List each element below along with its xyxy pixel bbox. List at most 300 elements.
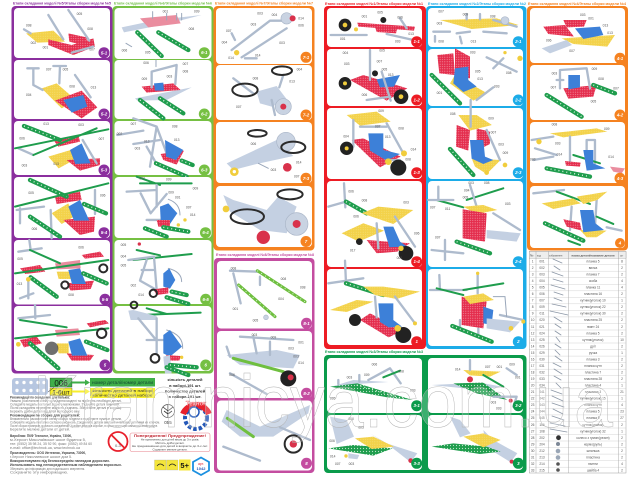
- panel: step 6-4: 009: [166, 178, 172, 182]
- table rows: 4: [621, 403, 623, 407]
- panel: step 2-4: 004: [464, 188, 470, 192]
- table rows: дріт: [590, 344, 596, 348]
- table rows: 009: [539, 305, 545, 309]
- panel: step 6-2: 007: [183, 62, 188, 66]
- panel: step 8-2: 003: [293, 354, 299, 358]
- table rows: 2: [621, 331, 623, 335]
- panel: step 4-3: 008: [552, 122, 557, 126]
- table rows: 25: [531, 416, 535, 420]
- table rows: 215: [539, 468, 545, 472]
- panel: step 1-2: 007: [377, 60, 382, 64]
- table rows: кутник(уголок) 30: [580, 312, 606, 316]
- panel: step 7-3: 006: [251, 142, 256, 146]
- panel: step 7-1: 007: [226, 29, 232, 33]
- panel: step 3-3: 003: [349, 462, 354, 466]
- table rows: 029: [539, 351, 545, 355]
- heading: stage 7: Етапи складання моделі №7/Этапы сборки модели №7: [215, 2, 313, 6]
- table rows: 2: [621, 325, 623, 329]
- panel: step 7-2: 013: [289, 80, 295, 84]
- panel: step 8-1: 005: [253, 318, 258, 322]
- table rows: 23: [620, 410, 624, 414]
- table rows: 2: [621, 436, 623, 440]
- text: instructions and manufacturer details: Берегите мелкие детали от детей.: [10, 428, 70, 432]
- badge 7: 7: [305, 239, 308, 244]
- badge 2-2: 2-2: [514, 98, 522, 102]
- text: instructions and manufacturer details: тел: (0552) 35 98 24, 35 92 90, факс: (0552) 49 84 60: [10, 442, 92, 446]
- table rows: 1: [621, 351, 623, 355]
- panel: step 3-3: 008: [348, 417, 354, 421]
- panel: step 1-2: 005: [379, 49, 385, 53]
- table rows: 2: [621, 266, 623, 270]
- panel: step 3-1: 003: [410, 389, 416, 393]
- panel: step 6-4: 009: [193, 186, 198, 190]
- table rows: 021: [539, 325, 545, 329]
- table rows: планка 5: [586, 331, 600, 335]
- panel: step 5-5: 005: [17, 257, 23, 261]
- panel: step 2-1: 007: [438, 9, 444, 13]
- table rows: 024: [539, 331, 545, 335]
- panel: step 2-2: [428, 48, 524, 106]
- table rows: 18: [531, 370, 535, 374]
- legend: part number and quantity: кількість деталей в наборі: [92, 389, 153, 393]
- table rows: 16: [531, 357, 535, 361]
- text: instructions and manufacturer details: Внимательно рассмотрите схему сборки модели и подберите нужные детали.: [10, 417, 122, 421]
- panel: step 4-2: 007: [551, 86, 556, 90]
- table rows: 22: [531, 397, 535, 401]
- table rows: планка 9: [586, 416, 600, 420]
- panel: step 3-3: 003: [358, 425, 364, 429]
- panel: step 1-2: 003: [344, 62, 350, 66]
- table rows: 31: [531, 455, 535, 459]
- table rows: кутник(уголок) 32: [580, 429, 606, 433]
- panel: step 1-3: 014: [411, 148, 416, 152]
- panel: step 2-4: 008: [484, 181, 490, 185]
- frame: blue column: [426, 6, 526, 349]
- panel: step 6-5: 005: [121, 264, 126, 268]
- panel: step 7-1: 014: [298, 16, 304, 20]
- panel: step 6-2: [114, 60, 212, 120]
- panel: step 2-2: 003: [494, 84, 500, 88]
- panel: step 6-1: 006: [122, 49, 127, 53]
- panel: step 2-4: 005: [463, 195, 468, 199]
- warning: age restriction: Містить дрібні деталі.: [156, 441, 185, 445]
- panel: step 2-1: 008: [438, 40, 444, 44]
- icon: conformity mark: [162, 404, 174, 425]
- badge 8-2: 8-2: [303, 391, 310, 396]
- table rows: 21: [531, 390, 535, 394]
- panel: step 6-3: 003: [135, 146, 140, 150]
- badge 6-2: 6-2: [201, 112, 208, 116]
- panel: step 1 complete: [327, 261, 422, 347]
- table rows: 2: [621, 449, 623, 453]
- parts table: код: [537, 254, 542, 258]
- table rows: колесо з гумою(резин): [576, 436, 610, 440]
- panel: step 3-2: 001: [497, 365, 502, 369]
- table rows: 26: [531, 423, 535, 427]
- panel: step 8-1: [217, 261, 312, 329]
- table rows: 2: [621, 357, 623, 361]
- warning: age restriction: Попередження! Предупреждение!: [134, 434, 206, 438]
- parts table: назва деталі/название детали: [572, 254, 615, 258]
- panel: step 3-1: 005: [330, 396, 336, 400]
- badge 6-1: 6-1: [201, 50, 208, 55]
- table rows: 001: [539, 260, 545, 264]
- table rows: 23: [531, 403, 535, 407]
- panel: step 4-3: 014: [608, 155, 614, 159]
- table rows: 106: [539, 423, 545, 427]
- panel: step 6-1: [114, 8, 212, 59]
- table rows: 212: [539, 449, 545, 453]
- table rows: 202: [539, 436, 545, 440]
- panel: step 1-4: 006: [353, 214, 359, 218]
- badge 3-2: 3-2: [515, 403, 522, 408]
- panel: step 1-3: 008: [398, 126, 404, 130]
- panel: step 1-1: 003: [395, 40, 401, 44]
- badge 5-1: 5-1: [101, 50, 108, 55]
- panel: step 2 complete: [428, 269, 525, 347]
- table rows: 30: [531, 449, 535, 453]
- panel: step 8-1: 008: [281, 277, 286, 281]
- table rows: вилка: [589, 266, 598, 270]
- panel: step 1-1: 013: [408, 32, 414, 36]
- panel: step 1-4: 001: [397, 256, 402, 260]
- heading: stage 8: Етапи складання моделі №8/Этапы сборки модели №8: [216, 253, 314, 257]
- panel: step 5-4: [14, 177, 110, 238]
- frame: orange column two: [527, 6, 628, 250]
- heading: stage 3: Етапи складання моделі №3/Этапы сборки модели №3: [325, 350, 423, 354]
- badge 5-4: 5-4: [101, 230, 108, 235]
- panel: step 1-1: 006: [397, 16, 403, 20]
- badge 1: 1: [415, 339, 418, 344]
- panel: step 5-5: 013: [17, 282, 22, 286]
- panel: step 7-3: 014: [296, 160, 302, 164]
- table rows: ручка: [589, 351, 597, 355]
- text: instructions and manufacturer details: Сохраните эту информацию.: [10, 470, 68, 474]
- panel: step 2-4: 003: [468, 181, 474, 185]
- badge 6: 6: [204, 362, 207, 368]
- panel: step 6-4: 009: [168, 190, 174, 194]
- table rows: 043: [539, 403, 545, 407]
- table rows: пластина 28: [584, 377, 602, 381]
- heading: stage 1: Етапи складання моделі №1/Этапы сборки модели №1: [325, 2, 423, 6]
- panel: step 7-1: 003: [257, 12, 263, 16]
- panel: step 8-2: 009: [271, 335, 276, 339]
- text: instructions and manufacturer details: Использовать под непосредственным наблюдением взрослых.: [10, 463, 122, 467]
- panel: step 6-3: 002: [117, 132, 122, 136]
- panel: step 3-2: 007: [485, 365, 491, 369]
- panel: step 6-2: 003: [167, 74, 172, 78]
- badges: age and article: [154, 458, 209, 475]
- panel: step 5-4: 005: [28, 191, 34, 195]
- panel: step 5-1: 008: [87, 27, 93, 31]
- panel: step 5-3: 003: [78, 123, 84, 127]
- panel: step 5-3: 013: [53, 162, 59, 166]
- panel: step 8-2: 001: [298, 340, 304, 344]
- panel: step 3-2: 001: [515, 376, 521, 380]
- badge 2-1: 2-1: [514, 39, 522, 44]
- badge 5-5: 5-5: [102, 297, 109, 302]
- panel: step 3-3: 006: [329, 439, 335, 443]
- heading: stage 2: Етапи складання моделі №2/Этапы сборки модели №2: [428, 2, 526, 6]
- table rows: 10: [620, 338, 624, 342]
- table rows: планка 5: [586, 260, 600, 264]
- table rows: гвинт 24: [587, 325, 599, 329]
- badge 5-3: 5-3: [101, 168, 108, 172]
- panel: step 3-1: 008: [398, 370, 404, 374]
- text: part count: кількість деталей: [167, 377, 203, 382]
- panel: step 6-4: 001: [175, 196, 181, 200]
- table rows: 14: [531, 344, 535, 348]
- table rows: 034: [539, 384, 545, 388]
- table rows: пластина: [586, 455, 600, 459]
- text: instructions and manufacturer details: м.Херсон Миколаївське шосе будинок 5,: [10, 438, 86, 442]
- panel: step 5-5: 006: [78, 245, 84, 249]
- badge 7-2: 7-2: [303, 112, 310, 118]
- table rows: 1: [621, 429, 623, 433]
- table rows: 006: [539, 292, 545, 296]
- text: instructions and manufacturer details: e-mail: office@technok.ua, www.technok.ua: [10, 446, 80, 450]
- panel: step 2-1: 003: [437, 22, 442, 26]
- table rows: 8: [532, 305, 534, 309]
- badge 2: 2: [516, 339, 520, 344]
- panel: step 5-4: 006: [32, 227, 37, 231]
- badge 1-3: 1-3: [414, 170, 420, 175]
- panel: step 1-1: 001: [362, 14, 367, 18]
- panel: step 5-1: 007: [89, 48, 95, 52]
- table rows: 031: [539, 364, 545, 368]
- table rows: 002: [539, 266, 545, 270]
- table rows: 27: [531, 429, 535, 433]
- panel: step 3-1: 006: [372, 362, 377, 366]
- panel: step 7-2: 007: [236, 105, 242, 109]
- panel: step 5-5: 008: [68, 293, 74, 297]
- table rows: 15: [531, 351, 535, 355]
- legend: part number and quantity: 1-6шт: [52, 389, 70, 396]
- panel: step 4-1: 003: [580, 13, 586, 17]
- panel: step 6-3: 013: [144, 140, 150, 144]
- panel: step 1-4: 006: [414, 232, 420, 236]
- panel: step 7-1: 003: [279, 41, 285, 45]
- legend: part number and quantity: номер деталі/номер детали: [92, 380, 153, 385]
- table rows: 28: [531, 436, 535, 440]
- panel: step 8-2: 014: [298, 361, 304, 365]
- panel: step 2-3: 008: [450, 112, 456, 116]
- table rows: 1: [621, 397, 623, 401]
- panel: step 7-2: 004: [297, 68, 302, 72]
- panel: step 2-2: 003: [470, 50, 476, 54]
- heading: stage 4: Етапи складання моделі №4/Этапы сборки модели №4: [528, 2, 626, 6]
- panel: step 1-1: 005: [377, 10, 383, 14]
- logo: technok gear: Технок: [186, 402, 206, 408]
- panel: step 4-2: 005: [591, 100, 596, 104]
- table rows: пластина 7: [585, 370, 601, 374]
- frame: orange column: [214, 6, 314, 250]
- badge 4-3: 4-3: [616, 176, 624, 181]
- table part drawings: [550, 259, 568, 432]
- table rows: 6: [532, 292, 534, 296]
- table rows: 2: [621, 468, 623, 472]
- panel: step 8-2: 003: [252, 333, 257, 337]
- table rows: планка кутн: [584, 403, 602, 407]
- panel: step 5-2: [14, 60, 110, 120]
- table rows: 2: [621, 318, 623, 322]
- text: instructions and manufacturer details: Складайте модель поетапно згідно з малюнками. З'єднуйте деталі гвинтами.: [10, 402, 120, 406]
- panel: step 7-1: 004: [222, 40, 227, 44]
- warning: age restriction: Не призначено для дітей віком до 3-х років.: [141, 438, 199, 442]
- frame: pink column: [214, 258, 314, 473]
- panel: step 4-1: 013: [607, 31, 613, 35]
- panel: step 7-1: 003: [251, 22, 256, 26]
- panel: step 8-2: [217, 331, 312, 399]
- table rows: 3: [532, 272, 534, 276]
- panel: step 4-1: 013: [603, 24, 608, 28]
- panel: step 6-1: 009: [194, 10, 200, 14]
- table rows: 2: [621, 377, 623, 381]
- panel: step 5-1: 002: [31, 41, 36, 45]
- table rows: гвинти: [588, 462, 598, 466]
- table rows: 2: [621, 423, 623, 427]
- panel: step 6-4: 003: [139, 176, 145, 180]
- panel: step 4-3: 003: [530, 158, 536, 162]
- panel: step 8-2: 003: [288, 346, 294, 350]
- panel: step 6-5: 014: [138, 293, 144, 297]
- panel: step 6-2: 006: [143, 61, 149, 65]
- panel: step 5-3: 007: [99, 137, 104, 141]
- table rows: 7: [532, 299, 534, 303]
- badges: age and article: 5+: [180, 461, 190, 470]
- table rows: 041: [539, 390, 545, 394]
- table rows: [531, 260, 624, 472]
- table rows: 24: [531, 410, 535, 414]
- table rows: шпилька: [587, 449, 600, 453]
- table rows: 020: [539, 318, 545, 322]
- panel: step 1-2: 006: [362, 93, 367, 97]
- panel: step 5-2: 007: [46, 68, 52, 72]
- table rows: 044: [539, 410, 545, 414]
- panel: step 2-1: [428, 8, 524, 47]
- panel: step 2-4: 007: [430, 205, 436, 209]
- table rows: 21: [620, 390, 624, 394]
- panel: step 2-2: 001: [437, 91, 442, 95]
- panel: step 6-1: 001: [163, 10, 168, 14]
- table rows: 2: [621, 312, 623, 316]
- panel: step 1-1: [327, 8, 422, 47]
- table rows: 213: [539, 455, 545, 459]
- panel: step 4-2: 003: [552, 72, 557, 76]
- panel: step 5-3: 003: [22, 164, 27, 168]
- text: instructions and manufacturer details: Рекомендації по складанню для батьків:: [10, 396, 70, 400]
- table rows: 4: [621, 462, 623, 466]
- table rows: планка кутн: [584, 364, 602, 368]
- badge 8: 8: [305, 461, 308, 466]
- table rows: 32: [531, 462, 535, 466]
- table rows: кутник(уголок): [582, 338, 604, 342]
- panel: step 3-2: [428, 358, 524, 413]
- panel: step 6-5: 002: [131, 284, 136, 288]
- warning: age restriction: 0-3: [115, 443, 122, 448]
- panel: step 6-2: 008: [183, 70, 188, 74]
- badge 6-5: 6-5: [203, 297, 209, 302]
- table rows: 2: [621, 292, 623, 296]
- panel: step 7-3: 007: [294, 174, 300, 178]
- parts table: [529, 252, 626, 473]
- panel: step 5-5: [14, 240, 110, 305]
- badges: age and article: 1042: [197, 466, 206, 471]
- legend: part number and quantity: количество деталей наборе: [92, 394, 152, 398]
- panel: step 5-3: [14, 121, 110, 176]
- parts table: №: [530, 254, 534, 258]
- table rows: 27: [620, 416, 624, 420]
- text: instructions and manufacturer details: г.Херсон Николаевское шоссе дом 5.: [10, 455, 72, 459]
- panel: step 1-4: [327, 181, 422, 267]
- table rows: пластина 4: [585, 384, 601, 388]
- badge 7-3: 7-3: [303, 176, 310, 181]
- panel: step 5-1: [14, 8, 110, 58]
- table rows: 004: [539, 279, 545, 283]
- table rows: планка 11: [586, 286, 600, 290]
- panel: step 5 complete: [14, 305, 110, 371]
- table rows: 045: [539, 416, 545, 420]
- table rows: 10: [531, 318, 535, 322]
- text: instructions and manufacturer details: Уважно розгляньте схему складання моделі та підберіть необхідні деталі.: [10, 399, 122, 403]
- panel: step 6-3: [114, 118, 212, 177]
- table rows: 026: [539, 344, 545, 348]
- table rows: 33: [531, 468, 535, 472]
- panel: step 6-2: 009: [142, 77, 147, 81]
- panel: step 7-1: 014: [255, 54, 261, 58]
- panel: step 6-5: [114, 240, 212, 305]
- table rows: 2: [621, 344, 623, 348]
- panel: step 2-1: 013: [471, 40, 476, 44]
- panel: step 5-2: 005: [63, 68, 68, 72]
- table rows: кермо(руль): [584, 442, 602, 446]
- panel: step 6-1: 005: [145, 50, 151, 54]
- badge 1-4: 1-4: [414, 259, 420, 264]
- table rows: 4: [621, 279, 623, 283]
- table rows: 007: [539, 299, 545, 303]
- panel: step 2-1: 009: [463, 12, 468, 16]
- table rows: 005: [539, 286, 545, 290]
- frame: red column: [324, 6, 426, 349]
- table rows: 204: [539, 442, 545, 446]
- panel: step 2-3: 007: [491, 130, 496, 134]
- panel: step 1-3: 008: [405, 158, 411, 162]
- warning: age restriction: Содержит мелкие детали.: [153, 447, 188, 451]
- text: instructions and manufacturer details: Собирайте модель поэтапно согласно рисункам. Соединяйте детали винтами и гайками, затягивая их ключом.: [10, 420, 160, 424]
- panel: step 8-1: 001: [233, 307, 238, 311]
- badge 5: 5: [104, 362, 107, 368]
- table rows: 17: [531, 364, 535, 368]
- heading: stage 5: Етапи складання моделі №5/Этапы сборки модели №5: [13, 2, 111, 6]
- icon: conformity mark: 055: [164, 420, 172, 425]
- badge 8-1: 8-1: [303, 321, 310, 326]
- text: instructions and manufacturer details: Производитель: ООО Интехник, Украина, 73000,: [10, 451, 86, 455]
- panel: step 1-2: 013: [388, 73, 394, 77]
- panel: step 1-4: 003: [403, 200, 409, 204]
- text: instructions and manufacturer details: [10, 396, 160, 474]
- table rows: 19: [531, 377, 535, 381]
- table rows: планка 3: [586, 357, 600, 361]
- panel: step 2-2: 005: [475, 70, 481, 74]
- text: instructions and manufacturer details: Виробник: ПКФ Технолог, Україна, 73000,: [10, 434, 72, 438]
- panel: step 7-1: 014: [228, 56, 234, 60]
- panel: step 7-3: 003: [271, 168, 276, 172]
- badge 3-1: 3-1: [414, 403, 420, 408]
- parts table: зображення: [549, 254, 563, 258]
- panel: step 3-1: 003: [347, 376, 352, 380]
- panel: step 5-2: 013: [91, 85, 96, 89]
- panel: step 3-2: 003: [491, 400, 496, 404]
